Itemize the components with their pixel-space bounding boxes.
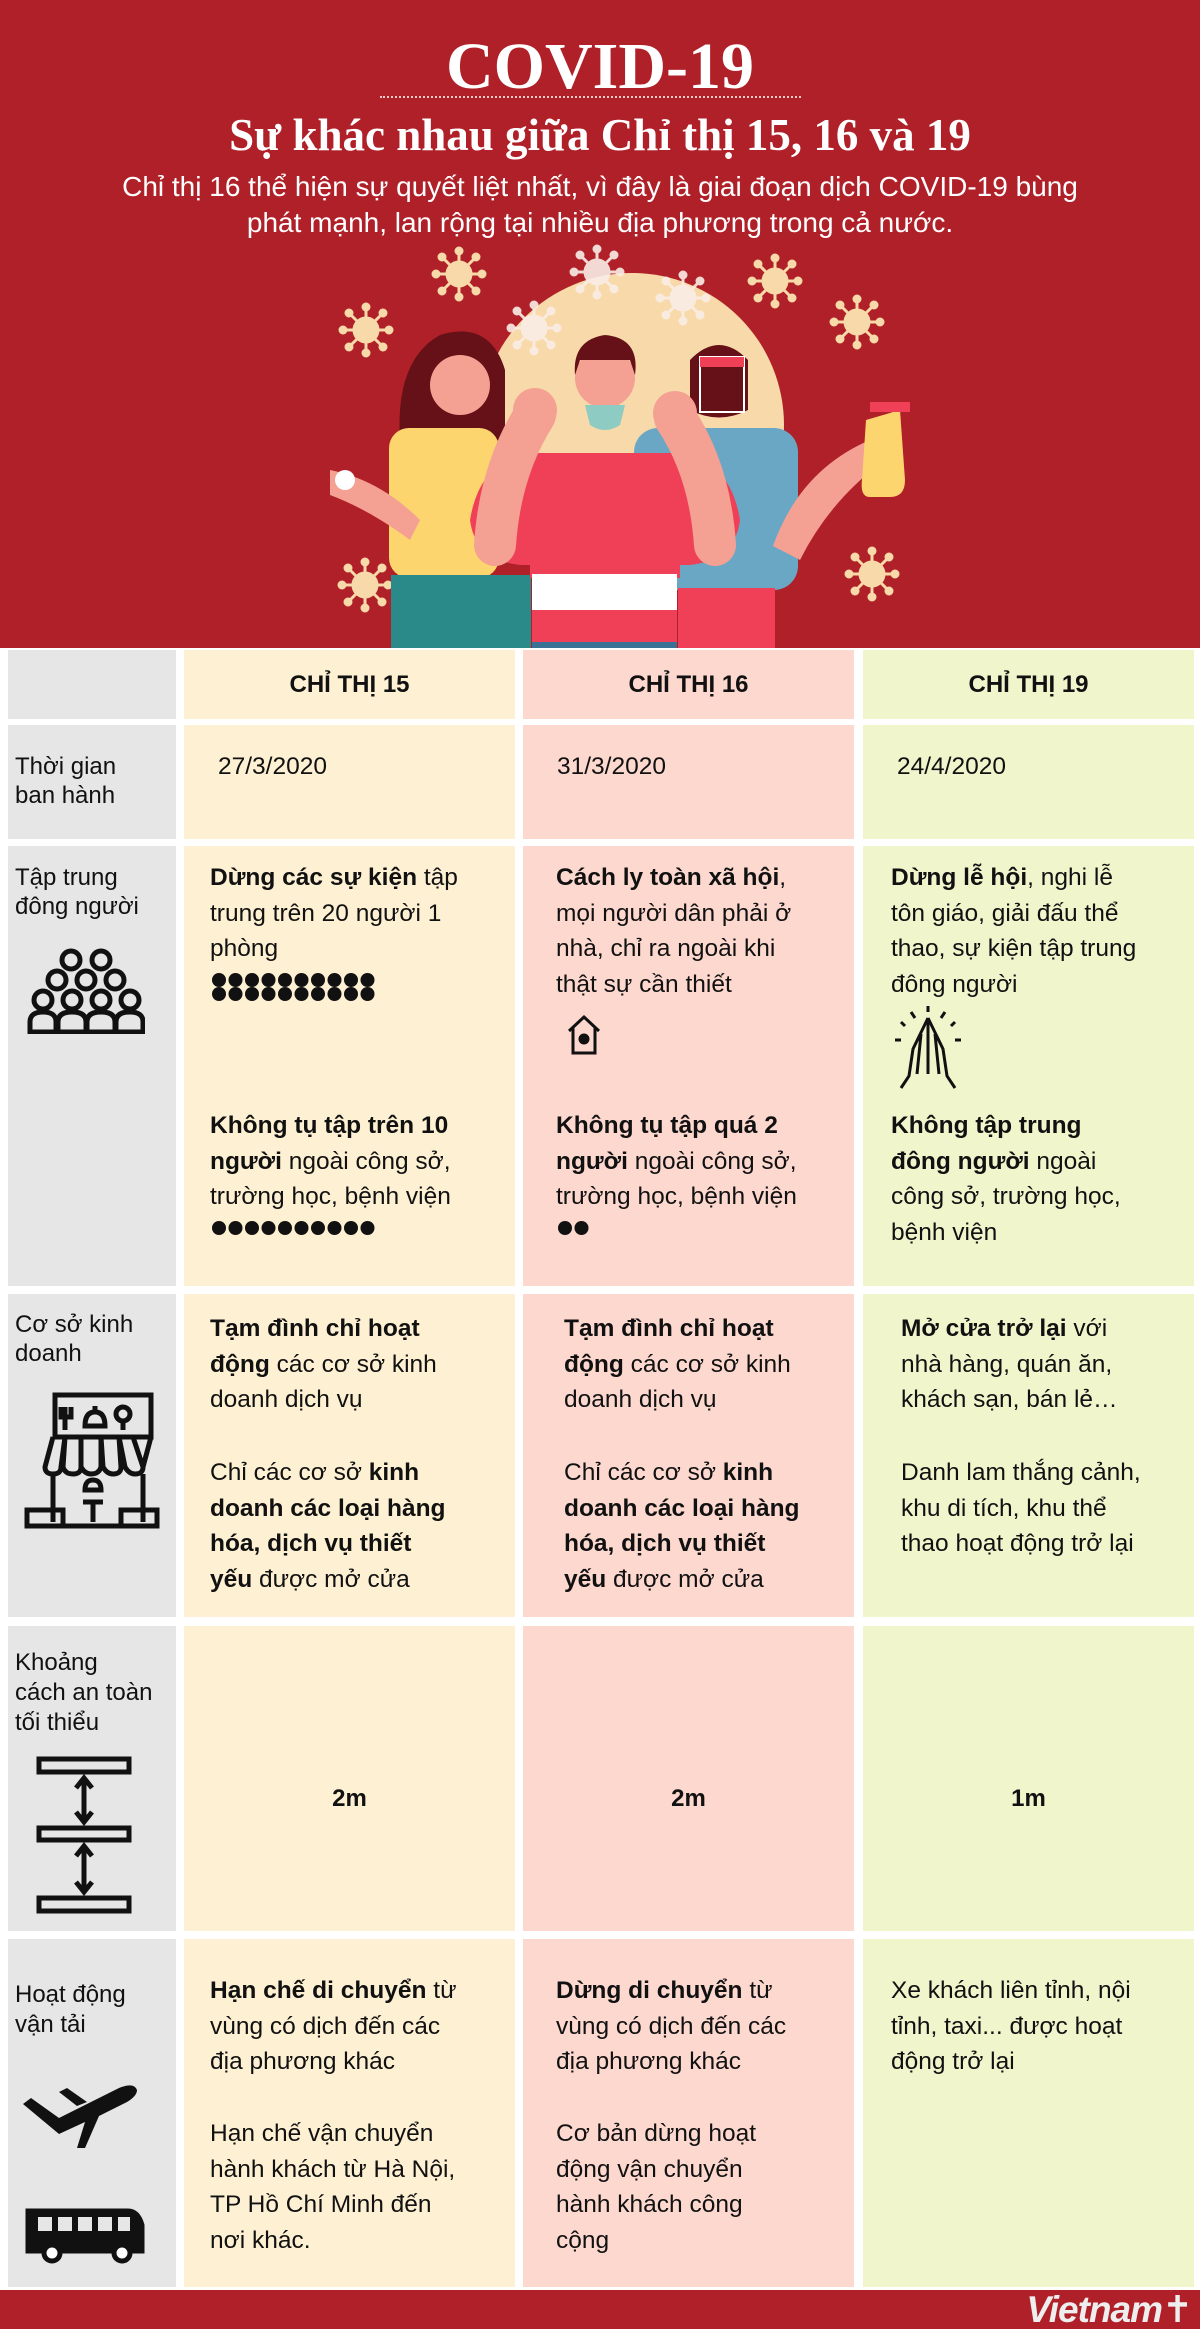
row: tập trung đông người: mọi người dân phải ở [556,900,791,927]
subtitle: Sự khác nhau giữa Chỉ thị 15, 16 và 19 [229,110,971,160]
dotted divider [380,96,801,98]
row: cơ sở kinh doanh: yếu được mở cửa [564,1566,764,1593]
table header row [8,650,1194,719]
row: hoạt động vận tải: Hoạt động [15,1981,126,2008]
illustration: people with masks [330,244,910,648]
title: COVID-19 [446,30,754,103]
row: thời gian ban hành: ban hành [15,782,115,809]
row: tập trung đông người: trường học, bệnh viện [556,1183,797,1210]
header: chỉ thị 15: CHỈ THỊ 15 [289,671,410,698]
dots: 10 people [212,1221,374,1235]
row: cơ sở kinh doanh: Mở cửa trở lại với [901,1315,1107,1342]
row: tập trung đông người: Dừng lễ hội, nghi lễ [891,864,1113,891]
header: chỉ thị 19: CHỈ THỊ 19 [968,671,1089,698]
icon: bus [26,2208,144,2264]
row: tập trung đông người: đông người ngoài [891,1148,1096,1175]
row: thời gian ban hành: Thời gian [15,753,116,780]
row: cơ sở kinh doanh: Chỉ các cơ sở kinh [210,1459,419,1486]
row: cơ sở kinh doanh: doanh dịch vụ [210,1386,363,1413]
description: phát mạnh, lan rộng tại nhiều địa phương trong cả nước. [247,207,953,238]
icon: plane [23,2085,137,2148]
row: hoạt động vận tải: động vận chuyển [556,2156,743,2183]
row: hoạt động vận tải: địa phương khác [556,2048,741,2075]
row: tập trung đông người: Không tụ tập quá 2 [556,1112,778,1139]
row: tập trung đông người: nhà, chỉ ra ngoài khi [556,935,775,962]
row: tập trung đông người: Cách ly toàn xã hội, [556,864,786,891]
row: tập trung đông người [8,846,1194,1286]
icon: store [24,1392,160,1528]
dots: 20 people [212,973,374,1001]
row: cơ sở kinh doanh: Tạm đình chỉ hoạt [210,1315,420,1342]
row: cơ sở kinh doanh: doanh các loại hàng [564,1495,800,1522]
dots: 2 people [558,1221,588,1235]
row: tập trung đông người: thật sự cần thiết [556,971,732,998]
description [122,171,1078,238]
row: cơ sở kinh doanh: hóa, dịch vụ thiết [564,1530,765,1557]
row: cơ sở kinh doanh: Cơ sở kinh [15,1311,133,1338]
row: hoạt động vận tải: vùng có dịch đến các [556,2013,786,2040]
row: tập trung đông người: Không tập trung [891,1112,1082,1139]
row: hoạt động vận tải: vùng có dịch đến các [210,2013,440,2040]
row: cơ sở kinh doanh: động các cơ sở kinh [210,1351,437,1378]
header banner [0,0,1200,648]
row: cơ sở kinh doanh: Danh lam thắng cảnh, [901,1459,1141,1486]
row: tập trung đông người: bệnh viện [891,1219,997,1246]
row: cơ sở kinh doanh: doanh [15,1340,82,1367]
row: cơ sở kinh doanh: khu di tích, khu thể [901,1495,1107,1522]
icon: house [568,1015,600,1054]
row: tập trung đông người: thao, sự kiện tập trung [891,935,1136,962]
row: khoảng cách an toàn: tối thiểu [15,1709,99,1736]
header: chỉ thị 15 [184,650,515,719]
row: hoạt động vận tải: vận tải [15,2011,86,2038]
row: cơ sở kinh doanh: doanh các loại hàng [210,1495,446,1522]
row: hoạt động vận tải: nơi khác. [210,2227,311,2254]
row: hoạt động vận tải: Cơ bản dừng hoạt [556,2120,756,2147]
row: hoạt động vận tải: hành khách công [556,2191,743,2218]
row: khoảng cách an toàn: 2m [332,1785,367,1812]
row: tập trung đông người: người ngoài công sở, [556,1148,797,1175]
header: chỉ thị 16 [523,650,854,719]
row: hoạt động vận tải: Hạn chế di chuyển từ [210,1977,456,2004]
row: tập trung đông người: người ngoài công sở, [210,1148,451,1175]
icon: crowd [28,948,145,1034]
row: thời gian ban hành: 24/4/2020 [897,753,1006,780]
icon: praying hands [895,1006,961,1089]
row: cơ sở kinh doanh: động các cơ sở kinh [564,1351,791,1378]
row: tập trung đông người: trường học, bệnh viện [210,1183,451,1210]
row: cơ sở kinh doanh: nhà hàng, quán ăn, [901,1351,1112,1378]
row: tập trung đông người: Tập trung [15,864,118,891]
row: cơ sở kinh doanh: khách sạn, bán lẻ… [901,1386,1118,1413]
row: khoảng cách an toàn: 2m [671,1785,706,1812]
row: khoảng cách an toàn: cách an toàn [15,1679,152,1706]
right man [634,428,798,590]
row: cơ sở kinh doanh: yếu được mở cửa [210,1566,410,1593]
row: thời gian ban hành [8,725,1194,839]
description: Chỉ thị 16 thể hiện sự quyết liệt nhất, vì đây là giai đoạn dịch COVID-19 bùng [122,171,1078,202]
row: tập trung đông người: công sở, trường học, [891,1183,1121,1210]
row: tập trung đông người: trung trên 20 người 1 [210,900,441,927]
row: cơ sở kinh doanh: doanh dịch vụ [564,1386,717,1413]
row: tập trung đông người: Không tụ tập trên 10 [210,1112,448,1139]
row: hoạt động vận tải: địa phương khác [210,2048,395,2075]
row: cơ sở kinh doanh: Tạm đình chỉ hoạt [564,1315,774,1342]
row: hoạt động vận tải: tỉnh, taxi... được hoạt [891,2013,1122,2040]
row: tập trung đông người: tôn giáo, giải đấu thể [891,900,1118,927]
row: cơ sở kinh doanh: Chỉ các cơ sở kinh [564,1459,773,1486]
center man [530,453,680,578]
row: hoạt động vận tải: hành khách từ Hà Nội, [210,2156,455,2183]
row: hoạt động vận tải: cộng [556,2227,609,2254]
row: thời gian ban hành: 27/3/2020 [218,753,327,780]
row: khoảng cách an toàn: Khoảng [15,1649,98,1676]
woman [400,332,505,450]
row: tập trung đông người: đông người [15,893,139,920]
row: tập trung đông người: Dừng các sự kiện tập [210,864,458,891]
row: hoạt động vận tải [8,1939,1194,2287]
logo: Vietnam+: Vietnam✝ [1026,2289,1192,2330]
row: hoạt động vận tải: động trở lại [891,2048,1015,2075]
footer with logo [0,2290,1200,2329]
row: thời gian ban hành: 31/3/2020 [557,753,666,780]
row: hoạt động vận tải: Dừng di chuyển từ [556,1977,773,2004]
icon: distance [36,1756,132,1914]
row: khoảng cách an toàn: 1m [1011,1785,1046,1812]
row: tập trung đông người: phòng [210,935,278,962]
row: cơ sở kinh doanh [8,1294,1194,1617]
row: hoạt động vận tải: Xe khách liên tỉnh, nội [891,1977,1131,2004]
row: hoạt động vận tải: Hạn chế vận chuyển [210,2120,433,2147]
row: cơ sở kinh doanh: thao hoạt động trở lại [901,1530,1134,1557]
header: chỉ thị 19 [863,650,1194,719]
row: khoảng cách an toàn [8,1626,1194,1931]
row: cơ sở kinh doanh: hóa, dịch vụ thiết [210,1530,411,1557]
row: tập trung đông người: đông người [891,971,1017,998]
header: chỉ thị 16: CHỈ THỊ 16 [628,671,749,698]
row: hoạt động vận tải: TP Hồ Chí Minh đến [210,2191,432,2218]
